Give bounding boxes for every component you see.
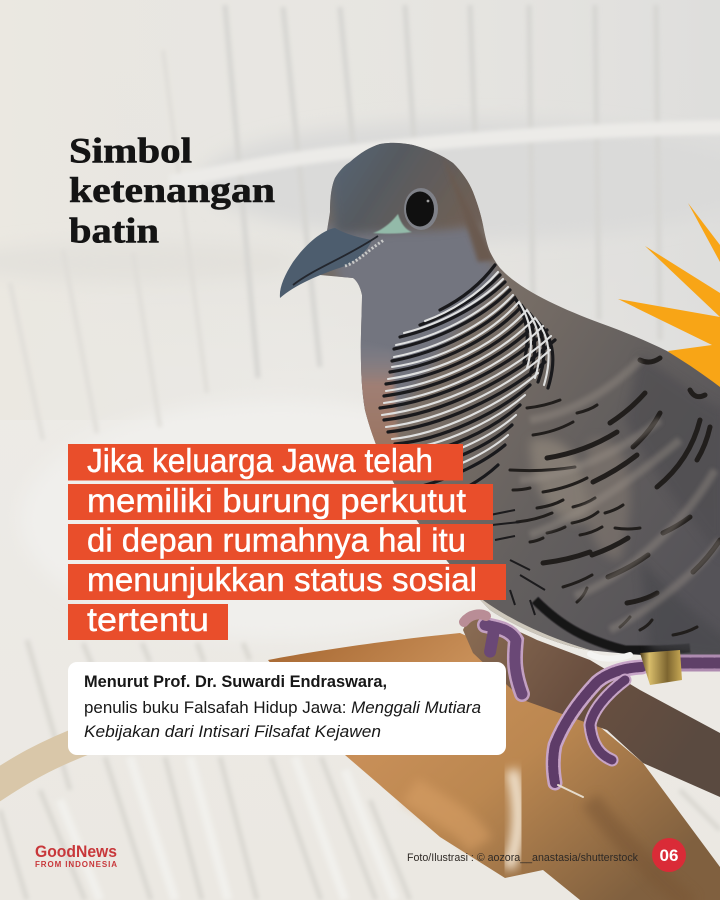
wing feather highlights: [520, 360, 720, 630]
eye: [404, 188, 438, 230]
right foot: [553, 663, 720, 797]
white toe band: [590, 654, 630, 659]
title: [69, 130, 275, 250]
highlighted statement: menunjukkan status sosial: [87, 561, 477, 598]
curved cage rail: [0, 738, 90, 790]
belly feather streaks: [490, 510, 545, 615]
bird: perkutut dove: [280, 135, 720, 660]
neck stripes: [380, 265, 555, 502]
beak line: [293, 236, 378, 285]
wing feather marks: [510, 358, 720, 635]
page number badge: 06: [660, 846, 678, 865]
beak: [280, 228, 372, 298]
source card: Menurut Prof. Dr. Suwardi Endraswara,: [84, 672, 387, 691]
logo: GoodNews from Indonesia: GoodNews: [35, 842, 117, 861]
title: ketenangan: [69, 170, 275, 210]
highlight bars: [68, 444, 506, 640]
sunburst: [618, 203, 720, 420]
bird body: [320, 135, 720, 660]
highlighted statement: di depan rumahnya hal itu: [87, 522, 466, 558]
wooden branch: [463, 616, 720, 797]
source card: penulis buku Falsafah Hidup Jawa: Menggali Mutiara: [84, 698, 481, 717]
logo: GoodNews from Indonesia: FROM INDONESIA: [35, 860, 117, 869]
wooden perch stand: [268, 633, 720, 900]
photo credit: Foto/Ilustrasi : © aozora__anastasia/shutterstock: [407, 852, 638, 864]
highlighted statement: Jika keluarga Jawa telah: [87, 442, 433, 479]
source card: [68, 662, 506, 755]
gold leg ring: [640, 650, 682, 685]
left foot: [464, 614, 522, 694]
logo: GoodNews from Indonesia: [35, 842, 117, 869]
bird feet: [464, 614, 720, 797]
source card: Kebijakan dari Intisari Filsafat Kejawen: [84, 722, 381, 741]
cheek speckle: [345, 240, 384, 266]
page number badge: [652, 838, 686, 872]
title: Simbol: [69, 130, 192, 170]
highlighted statement: tertentu: [87, 601, 209, 638]
green eye patch: [373, 214, 412, 234]
highlighted statement: [68, 442, 506, 640]
highlighted statement: memiliki burung perkutut: [87, 482, 466, 519]
title: batin: [69, 210, 159, 250]
